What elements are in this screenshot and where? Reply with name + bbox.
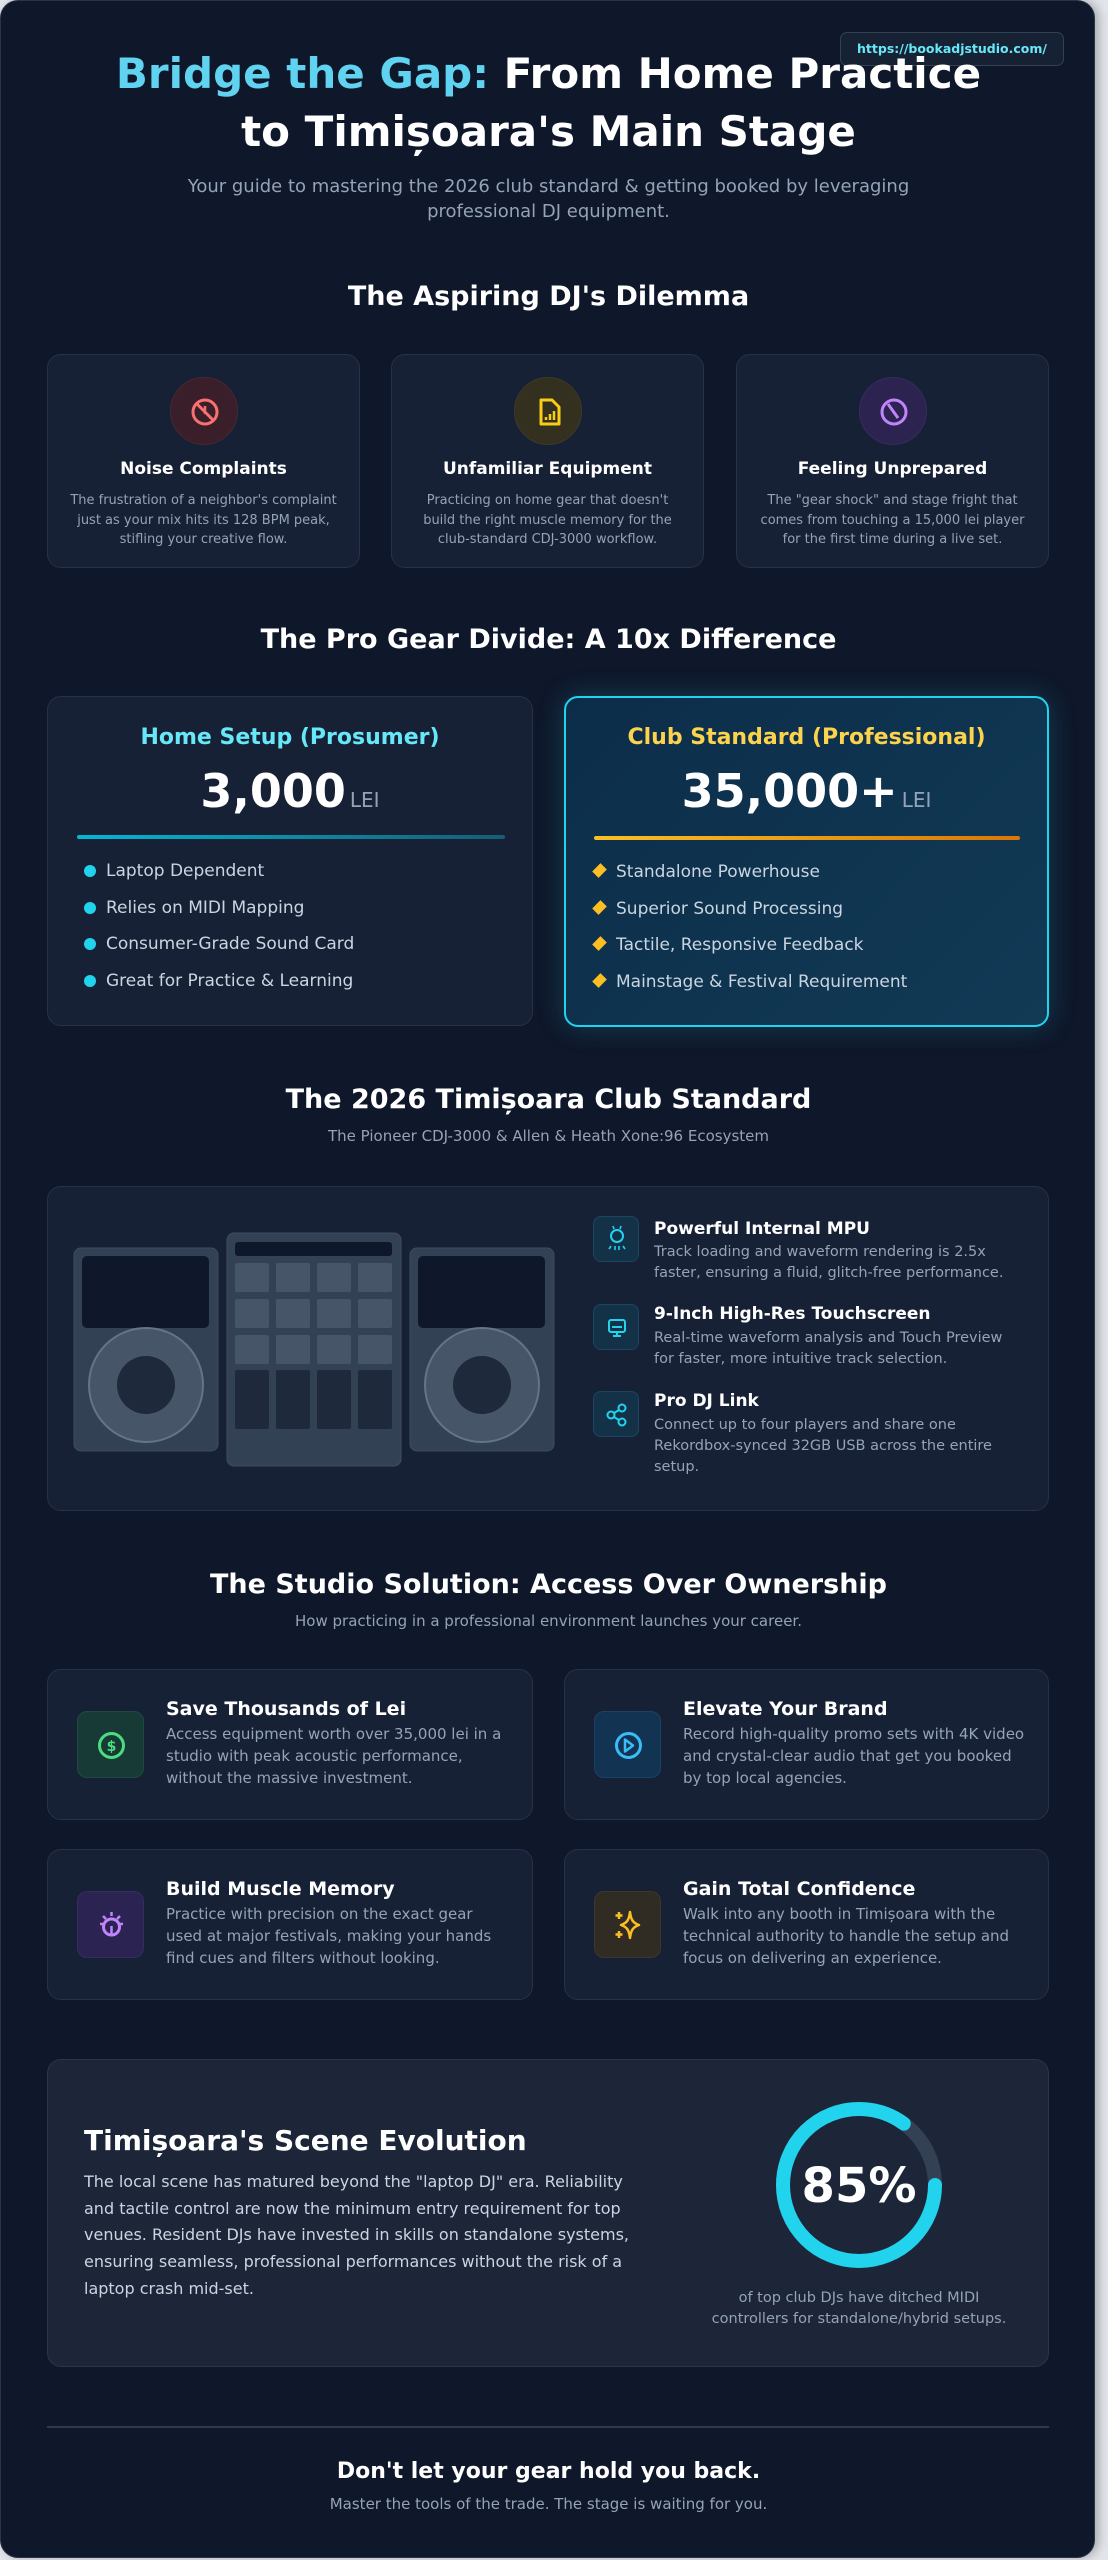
- list: club features: Mainstage & Festival Requirement: [616, 972, 907, 992]
- panel: gear showcase: [47, 1186, 1049, 1511]
- heading: club standard: The 2026 Timișoara Club Standard: [286, 1084, 811, 1115]
- illustration: decks and mixer: [74, 1232, 554, 1466]
- caption: of top club DJs have ditched MIDI controllers for standalone/hybrid setups.: [712, 2290, 1006, 2327]
- icon: monitor: [593, 1304, 639, 1350]
- feature: pro dj link: [593, 1391, 992, 1475]
- subheading: The Pioneer CDJ-3000 & Allen & Heath Xone:96 Ecosystem: [328, 1127, 769, 1145]
- icon: no sound: [170, 377, 238, 445]
- feature: touchscreen: Real-time waveform analysis and Touch Preview for faster, more intuitive track selection.: [654, 1330, 1002, 1367]
- footer subtext: Master the tools of the trade. The stage is waiting for you.: [330, 2495, 767, 2513]
- list: home features: [84, 861, 354, 990]
- feature: pro dj link: Pro DJ Link: [654, 1391, 759, 1411]
- body text: [84, 2172, 629, 2298]
- icon: file chart: [514, 377, 582, 445]
- card: noise complaints: [47, 354, 360, 568]
- icon: chip: [593, 1216, 639, 1262]
- list: home features: Consumer-Grade Sound Card: [106, 934, 354, 954]
- price: 35000: 35,000+LEI: [682, 764, 931, 818]
- title: Bridge the Gap: From Home Practice: [116, 49, 981, 98]
- card: elevate brand: Elevate Your Brand: [683, 1698, 888, 1720]
- panel: scene evolution: [47, 2059, 1049, 2367]
- card: save thousands: [47, 1669, 533, 1820]
- body text: venues. Resident DJs have invested in skills on standalone systems,: [84, 2225, 629, 2244]
- list: home features: Laptop Dependent: [106, 861, 264, 881]
- footer heading: Don't let your gear hold you back.: [337, 2459, 760, 2484]
- card: elevate brand: Record high-quality promo sets with 4K video and crystal-clear audio that get you booked by top local agencies.: [683, 1725, 1024, 1787]
- subtitle: Your guide to mastering the 2026 club standard & getting booked by leveraging professional DJ equipment.: [188, 176, 909, 222]
- feature: pro dj link: Connect up to four players and share one Rekordbox-synced 32GB USB across the entire setup.: [654, 1417, 992, 1475]
- card: muscle memory: [47, 1849, 533, 2000]
- panel: home setup: [47, 696, 533, 1026]
- heading: studio solution: The Studio Solution: Access Over Ownership: [210, 1569, 887, 1600]
- list: club features: Standalone Powerhouse: [616, 862, 820, 882]
- feature: MPU: [593, 1216, 1003, 1281]
- card: elevate brand: [564, 1669, 1049, 1820]
- panel: dilemma cards: [47, 354, 1049, 568]
- heading: scene evolution: Timișoara's Scene Evolution: [84, 2124, 527, 2157]
- url badge: https://bookadjstudio.com/: [857, 41, 1047, 56]
- body text: laptop crash mid-set.: [84, 2279, 254, 2298]
- feature: MPU: Track loading and waveform rendering is 2.5x faster, ensuring a fluid, glitch-free performance.: [654, 1244, 1003, 1281]
- chart: 85% ring: [776, 2102, 942, 2268]
- list: club features: [592, 862, 907, 992]
- panel: club standard: Club Standard (Professional): [627, 725, 986, 750]
- body text: and tactile control are now the minimum entry requirement for top: [84, 2199, 621, 2218]
- panel: club standard: [564, 696, 1049, 1027]
- feature: touchscreen: [593, 1304, 1002, 1367]
- title: to Timișoara's Main Stage: [241, 107, 856, 156]
- chart: 85% ring: 85%: [802, 2158, 916, 2214]
- card: feeling unprepared: [736, 354, 1049, 568]
- card: unfamiliar equipment: [391, 354, 704, 568]
- card: save thousands: Save Thousands of Lei: [166, 1698, 406, 1720]
- card: unfamiliar equipment: Unfamiliar Equipment: [443, 459, 652, 479]
- icon: sparkles: [594, 1891, 661, 1958]
- icon: coin: $: [107, 1739, 116, 1755]
- price: 3000: 3,000LEI: [200, 764, 380, 818]
- list: club features: Tactile, Responsive Feedback: [616, 935, 864, 955]
- card: confidence: Walk into any booth in Timișoara with the technical authority to handle the setup and focus on delivering an experience.: [683, 1905, 1009, 1967]
- body text: ensuring seamless, professional performances without the risk of a: [84, 2252, 622, 2271]
- icon: bulb: [77, 1891, 144, 1958]
- card: feeling unprepared: Feeling Unprepared: [798, 459, 987, 479]
- icon: play: [594, 1711, 661, 1778]
- feature: touchscreen: 9-Inch High-Res Touchscreen: [654, 1304, 930, 1324]
- panel: home setup: Home Setup (Prosumer): [140, 725, 440, 750]
- icon: gauge: [859, 377, 927, 445]
- title: [116, 49, 981, 156]
- heading: dilemma: The Aspiring DJ's Dilemma: [348, 281, 749, 312]
- body text: The local scene has matured beyond the "laptop DJ" era. Reliability: [84, 2172, 623, 2191]
- list: home features: Relies on MIDI Mapping: [106, 898, 304, 918]
- heading: pro gear divide: The Pro Gear Divide: A 10x Difference: [261, 624, 836, 655]
- list: club features: Superior Sound Processing: [616, 898, 843, 918]
- card: unfamiliar equipment: Practicing on home gear that doesn't build the right muscle memory for the club-standard CDJ-3000 workflow.: [423, 493, 672, 547]
- card: confidence: Gain Total Confidence: [683, 1878, 915, 1900]
- card: save thousands: Access equipment worth over 35,000 lei in a studio with peak acoustic performance, without the massive investment.: [166, 1725, 501, 1787]
- card: muscle memory: Practice with precision on the exact gear used at major festivals, making your hands find cues and filters without looking.: [166, 1905, 491, 1967]
- icon: share: [593, 1391, 639, 1437]
- card: noise complaints: The frustration of a neighbor's complaint just as your mix hits its 128 BPM peak, stifling your creative flow.: [70, 493, 337, 547]
- url badge: [840, 32, 1064, 66]
- card: confidence: [564, 1849, 1049, 2000]
- list: home features: Great for Practice & Learning: [106, 970, 353, 990]
- card: feeling unprepared: The "gear shock" and stage fright that comes from touching a 15,000 lei player for the first time during a live set.: [761, 493, 1024, 547]
- icon: coin: [77, 1711, 144, 1778]
- card: noise complaints: Noise Complaints: [120, 459, 287, 479]
- feature: MPU: Powerful Internal MPU: [654, 1219, 870, 1239]
- subheading: How practicing in a professional environment launches your career.: [295, 1612, 802, 1630]
- card: muscle memory: Build Muscle Memory: [166, 1878, 395, 1900]
